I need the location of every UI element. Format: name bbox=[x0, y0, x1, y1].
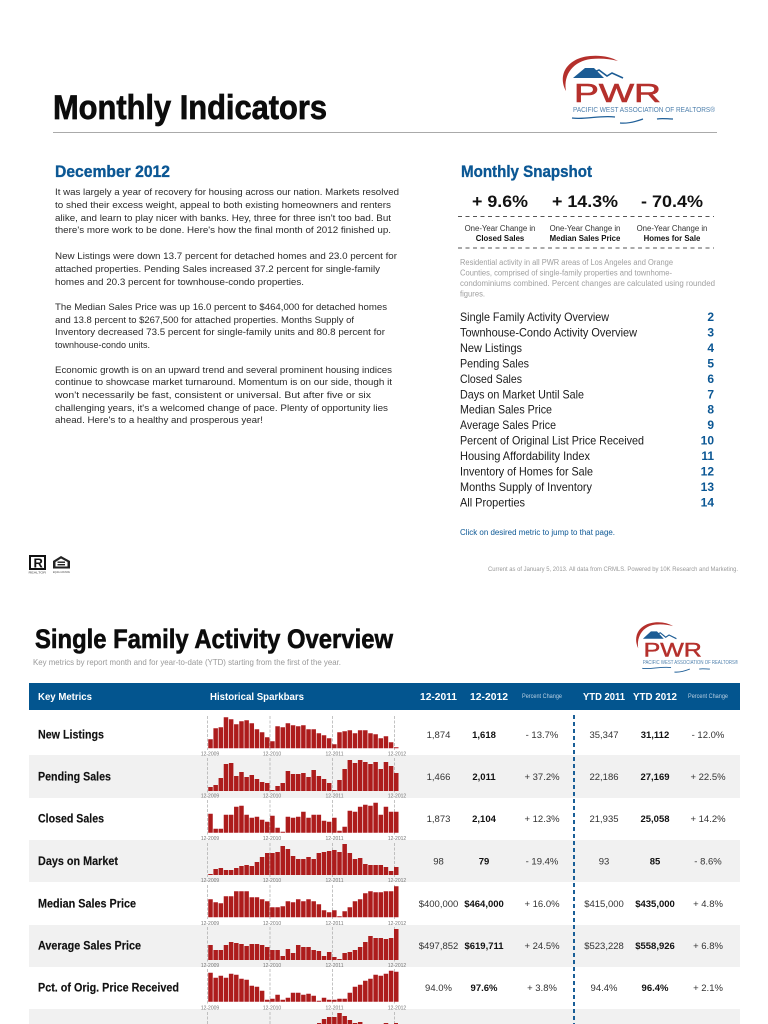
icon: Realtor mark bbox=[28, 555, 47, 574]
table values: 97.6% bbox=[471, 983, 498, 994]
table of contents: titles bbox=[460, 310, 644, 510]
icon: Equal housing bbox=[53, 556, 70, 574]
text block: intro narrative: won't necessarily be fast, consistent or universal. But after five or six bbox=[54, 390, 371, 401]
table values: 21,935 bbox=[589, 814, 619, 825]
sparkbars: Pending Sales bbox=[210, 760, 396, 791]
logo: PWR small: PACIFIC WEST ASSOCIATION OF REALTORS® bbox=[643, 659, 738, 666]
sparkbar date labels: 12-2012 bbox=[388, 878, 406, 884]
panel: snapshot figures: Median Sales Price bbox=[550, 234, 621, 243]
text block: intro narrative: Inventory decreased 73.5 percent for single-family units and 80.8 percent for bbox=[55, 327, 385, 338]
table values: + 22.5% bbox=[690, 772, 726, 783]
metric labels: Median Sales Price bbox=[38, 896, 136, 910]
table of contents: titles: New Listings bbox=[460, 341, 522, 355]
table values: - 13.7% bbox=[526, 730, 559, 741]
sparkbars: Median Sales Price bbox=[210, 886, 396, 917]
sparkbars: New Listings bbox=[210, 717, 396, 748]
table values: 1,618 bbox=[472, 730, 496, 741]
table values: + 2.1% bbox=[693, 983, 723, 994]
table values: 1,873 bbox=[427, 814, 450, 825]
table of contents: titles: Median Sales Price bbox=[460, 402, 552, 416]
logo: PWR large: PACIFIC WEST ASSOCIATION OF REALTORS® bbox=[573, 105, 715, 114]
sparkbar date labels bbox=[201, 752, 406, 1012]
table of contents: page numbers: 14 bbox=[701, 496, 714, 510]
title: Single Family Activity Overview: Single Family Activity Overview bbox=[35, 624, 394, 654]
table of contents: titles: Townhouse-Condo Activity Overview bbox=[460, 326, 637, 340]
footnote: Current as of January 5, 2013. All data from CRMLS. Powered by 10K Research and Marketing. bbox=[488, 567, 738, 573]
table values: 31,112 bbox=[641, 730, 669, 741]
logo: PWR small bbox=[636, 622, 738, 672]
panel: snapshot figures: One-Year Change in bbox=[637, 224, 707, 233]
table of contents: page numbers: 3 bbox=[707, 326, 714, 340]
table values: 79 bbox=[479, 856, 489, 868]
divider: dashed blue vertical bbox=[573, 715, 575, 1024]
text block: residential activity note: Residential activity in all PWR areas of Los Angeles and Orange bbox=[460, 258, 674, 267]
metric labels: Days on Market bbox=[38, 854, 118, 868]
table values: + 37.2% bbox=[524, 772, 560, 783]
table of contents: page numbers: 4 bbox=[707, 341, 714, 355]
table values: + 16.0% bbox=[524, 899, 560, 910]
table of contents: page numbers: 7 bbox=[707, 388, 714, 402]
metric labels: Average Sales Price bbox=[38, 938, 141, 952]
text block: intro narrative: continue to showcase market turnaround. Momentum is on our side, though it bbox=[55, 377, 392, 388]
text block: intro narrative bbox=[54, 187, 399, 426]
subtitle: Key metrics by report month and for year-to-date (YTD) starting from the first of the year. bbox=[33, 657, 341, 667]
table values: $435,000 bbox=[635, 899, 675, 910]
title: Monthly Indicators: Monthly Indicators bbox=[53, 89, 327, 127]
table values: + 4.8% bbox=[693, 899, 723, 910]
text block: intro narrative: ahead. Here's to a healthy and prosperous year! bbox=[55, 415, 263, 426]
text block: intro narrative: townhouse-condo units. bbox=[55, 340, 150, 351]
table values: + 3.8% bbox=[527, 983, 557, 994]
sparkbar date labels: 12-2009 bbox=[201, 1006, 219, 1012]
sparkbar guides bbox=[208, 716, 394, 1024]
heading: December 2012: December 2012 bbox=[55, 162, 170, 181]
table of contents: titles: All Properties bbox=[460, 496, 525, 510]
table values: $400,000 bbox=[419, 899, 458, 910]
sparkbar date labels: 12-2009 bbox=[201, 752, 219, 758]
sparkbar date labels: 12-2009 bbox=[201, 921, 219, 927]
panel: snapshot figures: + 14.3% bbox=[552, 192, 618, 211]
sparkbars: Pct. of Orig. Price Received bbox=[210, 971, 396, 1002]
panel: snapshot figures: Closed Sales bbox=[476, 234, 525, 243]
table values: 1,466 bbox=[427, 772, 450, 783]
logo: PWR large bbox=[563, 56, 715, 123]
metric labels: Closed Sales bbox=[38, 812, 104, 826]
table of contents: titles: Closed Sales bbox=[460, 372, 522, 386]
sparkbar date labels: 12-2012 bbox=[388, 921, 406, 927]
sparkbar date labels: 12-2012 bbox=[388, 963, 406, 969]
table values: 96.4% bbox=[642, 983, 669, 994]
text block: intro narrative: attached properties. Pending Sales increased 37.2 percent for single-family bbox=[55, 264, 380, 275]
logo: PWR large: PWR bbox=[574, 78, 661, 108]
table header: Percent Change bbox=[688, 694, 729, 700]
table of contents: page numbers: 6 bbox=[707, 372, 714, 386]
text block: residential activity note bbox=[460, 258, 715, 298]
table values: 93 bbox=[599, 856, 609, 868]
panel: snapshot figures bbox=[458, 192, 714, 248]
table values: 25,058 bbox=[640, 814, 670, 825]
table of contents: titles: Days on Market Until Sale bbox=[460, 388, 584, 402]
icon: Equal housing: EQUAL HOUSING bbox=[53, 570, 70, 574]
sparkbar date labels: 12-2011 bbox=[326, 878, 344, 884]
table values: + 24.5% bbox=[524, 941, 560, 952]
table header: Historical Sparkbars bbox=[210, 691, 304, 703]
sparkbar date labels: 12-2012 bbox=[388, 836, 406, 842]
text block: intro narrative: New Listings were down 13.7 percent for detached homes and 23.0 percent for bbox=[55, 251, 397, 262]
sparkbar date labels: 12-2011 bbox=[326, 836, 344, 842]
table of contents: page numbers: 8 bbox=[707, 402, 714, 416]
sparkbar date labels: 12-2010 bbox=[263, 794, 281, 800]
table values: 85 bbox=[650, 856, 661, 868]
text block: intro narrative: It was largely a year of recovery for housing across our nation. Markets resolved bbox=[55, 187, 399, 198]
sparkbar date labels: 12-2010 bbox=[263, 878, 281, 884]
metric labels: New Listings bbox=[38, 728, 104, 742]
table values: + 12.3% bbox=[524, 814, 560, 825]
text block: intro narrative: challenging years, it's a welcomed change of pace. Plenty of opportunity lies bbox=[55, 403, 388, 414]
sparkbar date labels: 12-2010 bbox=[263, 921, 281, 927]
table of contents: page numbers: 11 bbox=[701, 449, 714, 463]
table values: 2,104 bbox=[472, 814, 497, 825]
table values: $497,852 bbox=[419, 941, 458, 952]
table values: $558,926 bbox=[635, 941, 675, 952]
table values: $415,000 bbox=[584, 899, 624, 910]
sparkbars: Closed Sales bbox=[210, 803, 396, 833]
panel: snapshot figures: One-Year Change in bbox=[550, 224, 620, 233]
text block: residential activity note: condominiums combined. Percent changes are calculated using rounded bbox=[460, 279, 715, 288]
sparkbar date labels: 12-2011 bbox=[326, 794, 344, 800]
table header: Key Metrics bbox=[38, 691, 92, 703]
table of contents: page numbers: 9 bbox=[707, 418, 714, 432]
sparkbar date labels: 12-2010 bbox=[263, 752, 281, 758]
table values: 94.0% bbox=[425, 983, 453, 994]
table of contents: titles: Average Sales Price bbox=[460, 418, 556, 432]
text block: intro narrative: The Median Sales Price was up 16.0 percent to $464,000 for detached homes bbox=[55, 302, 387, 313]
table values: 94.4% bbox=[591, 983, 618, 994]
icon: Realtor mark: REALTOR bbox=[28, 570, 47, 574]
panel: snapshot figures: + 9.6% bbox=[472, 192, 528, 211]
text block: residential activity note: Counties, comprised of single-family properties and townhome- bbox=[460, 268, 672, 278]
sparkbar date labels: 12-2009 bbox=[201, 836, 219, 842]
table header bbox=[29, 683, 740, 710]
table values: - 8.6% bbox=[694, 856, 722, 868]
table header: Percent Change bbox=[522, 694, 563, 700]
sparkbar date labels: 12-2010 bbox=[263, 963, 281, 969]
table values: 22,186 bbox=[589, 772, 619, 783]
table values: - 12.0% bbox=[692, 730, 725, 741]
logo: PWR small: PWR bbox=[644, 639, 702, 661]
table of contents: page numbers: 12 bbox=[701, 464, 714, 478]
heading: Monthly Snapshot: Monthly Snapshot bbox=[461, 162, 592, 181]
text block: intro narrative: homes and 20.3 percent for townhouse-condo properties. bbox=[55, 277, 304, 288]
table of contents: titles: Inventory of Homes for Sale bbox=[460, 464, 593, 478]
metric labels: Pending Sales bbox=[38, 770, 111, 784]
table of contents: titles: Single Family Activity Overview bbox=[460, 310, 609, 324]
metric labels: Pct. of Orig. Price Received bbox=[38, 980, 179, 994]
sparkbar date labels: 12-2010 bbox=[263, 836, 281, 842]
table of contents: page numbers: 2 bbox=[707, 310, 714, 324]
table of contents: page numbers bbox=[701, 310, 714, 510]
table values: 1,874 bbox=[427, 730, 450, 741]
metric labels bbox=[38, 728, 179, 994]
table of contents: titles: Housing Affordability Index bbox=[460, 449, 590, 463]
text block: residential activity note: figures. bbox=[460, 290, 485, 298]
panel: snapshot figures: Homes for Sale bbox=[644, 234, 701, 243]
table of contents: page numbers: 13 bbox=[701, 480, 714, 494]
table values: 35,347 bbox=[589, 730, 619, 741]
text block: intro narrative: Economic growth is on an upward trend and several prominent housing indices bbox=[55, 365, 392, 376]
table values: + 14.2% bbox=[690, 814, 726, 825]
sparkbar date labels: 12-2010 bbox=[263, 1006, 281, 1012]
sparkbars: Average Sales Price bbox=[210, 929, 396, 960]
table values: - 19.4% bbox=[526, 856, 559, 868]
table values: $523,228 bbox=[584, 941, 624, 952]
table of contents: page numbers: 10 bbox=[701, 434, 714, 448]
sparkbar date labels: 12-2011 bbox=[326, 752, 344, 758]
link note: Click on desired metric to jump to that page. bbox=[460, 528, 615, 537]
table values: $464,000 bbox=[464, 899, 504, 910]
sparkbar date labels: 12-2009 bbox=[201, 963, 219, 969]
sparkbar date labels: 12-2012 bbox=[388, 1006, 406, 1012]
table of contents: page numbers: 5 bbox=[707, 356, 714, 370]
sparkbar date labels: 12-2012 bbox=[388, 794, 406, 800]
table values: + 6.8% bbox=[693, 941, 723, 952]
table values: 27,169 bbox=[640, 772, 670, 783]
table values: 2,011 bbox=[472, 772, 496, 783]
panel: snapshot figures: - 70.4% bbox=[641, 192, 703, 211]
table values bbox=[419, 730, 726, 994]
table header: YTD 2011 bbox=[583, 691, 625, 703]
icon: Realtor mark: R bbox=[34, 556, 44, 570]
table of contents: titles: Percent of Original List Price Received bbox=[460, 434, 644, 448]
table header: 12-2011 bbox=[420, 691, 457, 703]
sparkbar date labels: 12-2009 bbox=[201, 878, 219, 884]
sparkbars: partial row bbox=[319, 1013, 396, 1024]
table header: YTD 2012 bbox=[633, 691, 677, 703]
table values: 98 bbox=[433, 856, 444, 868]
text block: intro narrative: to shed their excess weight, appeal to both existing homeowners and renters bbox=[55, 200, 391, 211]
sparkbar date labels: 12-2011 bbox=[326, 1006, 344, 1012]
sparkbar date labels: 12-2012 bbox=[388, 752, 406, 758]
sparkbar date labels: 12-2011 bbox=[326, 963, 344, 969]
table values: $619,711 bbox=[464, 941, 504, 952]
text block: intro narrative: and 13.8 percent to $267,500 for attached properties. Months Supply of bbox=[55, 315, 354, 326]
row bands bbox=[29, 755, 740, 1024]
table of contents: titles: Pending Sales bbox=[460, 356, 529, 370]
panel: snapshot figures: One-Year Change in bbox=[465, 224, 535, 233]
table of contents: titles: Months Supply of Inventory bbox=[460, 480, 592, 494]
sparkbars: Days on Market bbox=[210, 844, 396, 875]
sparkbar date labels: 12-2009 bbox=[201, 794, 219, 800]
text block: intro narrative: alike, and learn to play nicer with banks. Hey, three for three isn't too bad. But bbox=[55, 213, 391, 224]
sparkbar date labels: 12-2011 bbox=[326, 921, 344, 927]
table header: 12-2012 bbox=[470, 691, 508, 703]
text block: intro narrative: there's more work to be done. Here's how the final month of 2012 finished up. bbox=[55, 225, 391, 236]
